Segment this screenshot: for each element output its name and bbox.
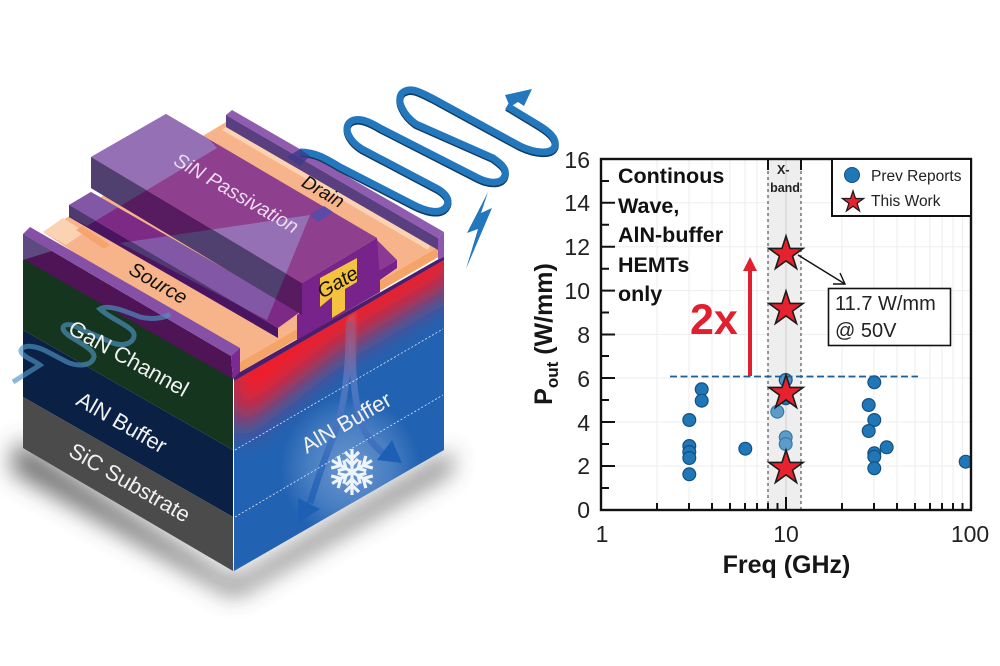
strip top xyxy=(226,110,444,238)
y axis title: P xyxy=(530,388,558,405)
wave body xyxy=(300,90,555,211)
x axis numbers xyxy=(596,521,989,547)
drain metal strip xyxy=(226,110,444,260)
SiN block top xyxy=(91,114,377,283)
gate contact icon xyxy=(320,258,357,318)
wave end over drain strip xyxy=(287,149,310,166)
reference line at 6 W/mm xyxy=(670,376,918,378)
heat plume xyxy=(347,312,356,380)
layer: AlN buffer, left face xyxy=(23,330,233,517)
y axis numbers: 4 xyxy=(577,410,590,436)
legend label: previous reports: Prev Reports xyxy=(871,168,962,185)
y axis numbers: 2 xyxy=(577,453,590,479)
label: SiN Passivation: SiN Passivation xyxy=(170,149,302,238)
beam contact on drain xyxy=(310,206,333,222)
light block top xyxy=(91,114,310,274)
plot frame xyxy=(601,159,971,510)
x axis title: Freq (GHz) xyxy=(723,551,850,579)
wave dark edge xyxy=(300,91,555,213)
label: Source: Source xyxy=(125,258,191,309)
X-band centre line xyxy=(785,159,787,510)
arrowhead: left heat path xyxy=(298,498,320,519)
label: AlN Buffer, left face: AlN Buffer xyxy=(72,387,171,458)
star 11.7 W/mm xyxy=(769,236,803,269)
y axis title: out xyxy=(543,361,562,388)
icon: lightning bolt xyxy=(466,192,492,269)
layer: GaN channel, left face xyxy=(23,258,233,450)
layer boundary dashes xyxy=(235,329,443,517)
label: X-band: X- xyxy=(777,163,790,177)
chart: output power versus frequency xyxy=(530,147,989,579)
star 1.9 W/mm xyxy=(769,450,803,483)
arrowhead: right heat path xyxy=(377,440,402,463)
y axis numbers: 14 xyxy=(564,190,590,216)
legend xyxy=(832,159,971,216)
label: GaN Channel: GaN Channel xyxy=(64,315,193,402)
wave: outgoing RF signal xyxy=(300,90,555,213)
right ledge front xyxy=(375,260,397,282)
X-band limits xyxy=(768,159,801,510)
right ledge top xyxy=(375,238,397,270)
strip top xyxy=(23,227,240,356)
star 5.4 W/mm xyxy=(769,375,803,408)
data: previous reports xyxy=(683,374,972,481)
axis ticks xyxy=(601,159,962,510)
legend marker: this work xyxy=(842,191,864,211)
light block side xyxy=(91,157,286,299)
note: measurement conditions: AlN-buffer xyxy=(618,223,724,247)
plot grid xyxy=(601,159,971,510)
device diagram: 3D HEMT block xyxy=(10,89,555,596)
red heat zone under channel xyxy=(234,260,444,446)
note: measurement conditions: only xyxy=(618,282,662,306)
note: measurement conditions: HEMTs xyxy=(618,253,689,277)
label: SiC Substrate: SiC Substrate xyxy=(65,438,195,527)
x axis numbers: 1 xyxy=(596,521,608,547)
icon: snowflake xyxy=(329,449,375,495)
label: Gate: Gate xyxy=(314,262,362,303)
x axis numbers: 100 xyxy=(951,521,989,547)
callout: 11.7 W/mm at 50V: @ 50V xyxy=(835,320,897,342)
block drop shadow xyxy=(10,440,452,596)
y axis numbers: 0 xyxy=(577,497,590,523)
arrow: right heat path xyxy=(352,322,387,456)
label: X-band: band xyxy=(770,181,800,195)
X-band shaded region xyxy=(768,159,801,510)
star 9.2 W/mm xyxy=(769,291,803,324)
y axis numbers: 10 xyxy=(564,278,590,304)
y axis title: (W/mm) xyxy=(530,263,558,362)
orange front face xyxy=(240,246,440,372)
orange metal plane xyxy=(43,122,440,362)
SiN lower ledge, top xyxy=(69,192,300,328)
heat and cooling flow on right face xyxy=(234,260,444,524)
data: this work stars xyxy=(769,236,803,483)
layer: SiC substrate, left face xyxy=(23,397,233,571)
light ledge top xyxy=(69,192,276,320)
y axis numbers: 16 xyxy=(564,147,590,173)
wave arrowhead xyxy=(505,89,532,107)
orange source highlight xyxy=(43,218,85,245)
callout: 11.7 W/mm at 50V xyxy=(828,288,950,346)
label: Drain: Drain xyxy=(298,172,348,213)
note: measurement conditions: Continous xyxy=(618,164,724,188)
strip side, light region xyxy=(23,234,52,260)
translucent lighter zones across SiN xyxy=(69,114,310,320)
legend marker: previous reports xyxy=(844,168,860,182)
glow around snowflake xyxy=(286,402,414,524)
top dark band on right face xyxy=(233,256,444,381)
right face: AlN buffer blue xyxy=(234,260,444,571)
arrow: left heat path xyxy=(310,322,349,503)
legend label: this work: This Work xyxy=(871,193,941,210)
light ledge side xyxy=(69,205,246,309)
callout: 11.7 W/mm at 50V: 11.7 W/mm xyxy=(835,293,936,315)
y axis numbers: 12 xyxy=(564,234,590,260)
gate pedestal front xyxy=(297,238,380,340)
x axis numbers: 10 xyxy=(773,521,799,547)
SiN block side xyxy=(91,157,302,315)
orange source darker stripe xyxy=(76,226,110,249)
SiN lower ledge, side xyxy=(69,205,278,338)
source metal strip xyxy=(23,227,240,379)
y axis numbers: 8 xyxy=(577,322,590,348)
arrow: callout pointer xyxy=(798,255,845,284)
wave: incoming RF signal xyxy=(13,307,170,382)
strip side xyxy=(23,234,233,379)
y axis numbers: 6 xyxy=(577,366,590,392)
strip side xyxy=(226,115,438,250)
y axis numbers xyxy=(564,147,590,523)
note: measurement conditions: Wave, xyxy=(618,194,679,218)
orange drain highlight xyxy=(222,127,430,250)
strip end xyxy=(231,348,240,379)
strip end xyxy=(438,232,444,260)
label: 2x: 2x xyxy=(690,296,738,344)
label: AlN Buffer, right face: AlN Buffer xyxy=(297,387,396,458)
arrow: 2x improvement xyxy=(743,257,757,376)
